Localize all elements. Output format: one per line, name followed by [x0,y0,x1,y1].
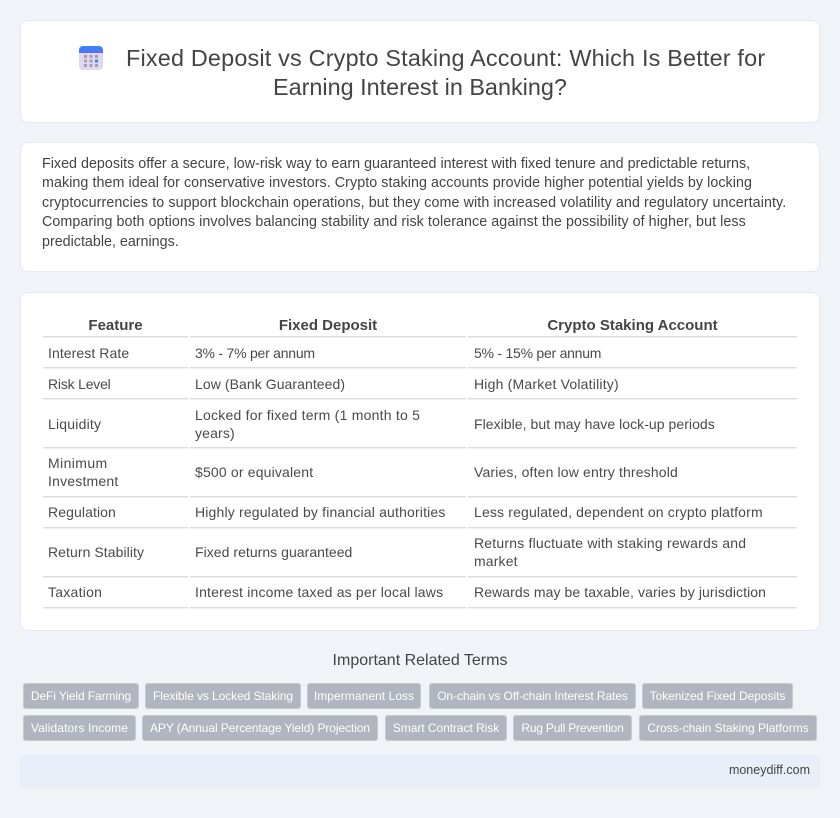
table panel [20,292,820,631]
table header: Crypto Staking Account [547,317,718,334]
row: return stability: Returns fluctuate with staking rewards and [474,535,746,551]
row: risk level: High (Market Volatility) [474,376,619,392]
tag [642,683,793,709]
row: regulation [48,504,763,520]
intro text: Comparing both options involves balancing stability and risk tolerance against the possibility of higher, but less [42,214,746,230]
tag: Impermanent Loss [314,689,414,703]
row: risk level: Risk Level [48,376,111,392]
row: return stability: Return Stability [48,544,144,560]
header panel [20,20,820,123]
tag: Rug Pull Prevention [521,721,624,735]
tag: Validators Income [31,721,128,735]
tag [385,715,507,741]
row: interest rate: Interest Rate [48,345,129,361]
tag [142,715,378,741]
intro text: Fixed deposits offer a secure, low-risk way to earn guaranteed interest with fixed tenure and predictable returns, [42,156,750,172]
row: regulation: Regulation [48,504,116,520]
related terms tags [23,683,817,741]
table header: Feature [88,317,143,334]
intro text: predictable, earnings. [42,234,179,250]
row: minimum investment: Varies, often low entry threshold [474,464,678,480]
row: interest rate [48,345,601,361]
row: return stability [48,535,746,569]
tag: Cross-chain Staking Platforms [647,721,809,735]
table header [88,317,718,334]
tag: Tokenized Fixed Deposits [650,689,785,703]
tag [307,683,421,709]
row: liquidity: Liquidity [48,416,101,432]
tag: APY (Annual Percentage Yield) Projection [150,721,370,735]
title: Earning Interest in Banking? [273,74,567,100]
row: minimum investment: Investment [48,473,118,489]
row: taxation: Interest income taxed as per local laws [195,584,443,600]
tag [513,715,632,741]
row: minimum investment: $500 or equivalent [195,464,313,480]
tag [23,683,139,709]
row: return stability: Fixed returns guaranteed [195,544,352,560]
related terms heading: Important Related Terms [333,652,507,669]
tag: On-chain vs Off-chain Interest Rates [437,689,628,703]
row: regulation: Less regulated, dependent on crypto platform [474,504,763,520]
intro text: cryptocurrencies to support blockchain operations, but they come with increased volatility and regulatory uncertainty. [42,195,786,211]
row: risk level [48,376,619,392]
row: liquidity: Flexible, but may have lock-up periods [474,416,715,432]
row: minimum investment [48,455,678,489]
row: risk level: Low (Bank Guaranteed) [195,376,345,392]
tag: Flexible vs Locked Staking [153,689,293,703]
footer bar [20,754,820,788]
row: interest rate: 3% - 7% per annum [195,345,315,361]
intro text [42,156,786,250]
tag [145,683,301,709]
intro text: making them ideal for conservative investors. Crypto staking accounts provide higher potential yields by locking [42,175,752,191]
title [126,45,765,100]
icon: calendar [79,46,103,70]
row: liquidity: Locked for fixed term (1 month to 5 [195,407,420,423]
title: Fixed Deposit vs Crypto Staking Account: Which Is Better for [126,45,765,71]
tag: DeFi Yield Farming [31,689,131,703]
comparison table [43,317,797,609]
row: regulation: Highly regulated by financial authorities [195,504,446,520]
intro panel [20,142,820,272]
source credit: moneydiff.com [729,763,810,777]
tag [429,683,636,709]
row: taxation: Taxation [48,584,102,600]
row: taxation: Rewards may be taxable, varies by jurisdiction [474,584,766,600]
row: minimum investment: Minimum [48,455,108,471]
row: return stability: market [474,553,518,569]
tag [639,715,817,741]
row: interest rate: 5% - 15% per annum [474,345,601,361]
row: taxation [48,584,766,600]
row: liquidity [48,407,715,441]
tag [23,715,136,741]
row: liquidity: years) [195,425,235,441]
table header: Fixed Deposit [279,317,377,334]
tag: Smart Contract Risk [393,721,499,735]
